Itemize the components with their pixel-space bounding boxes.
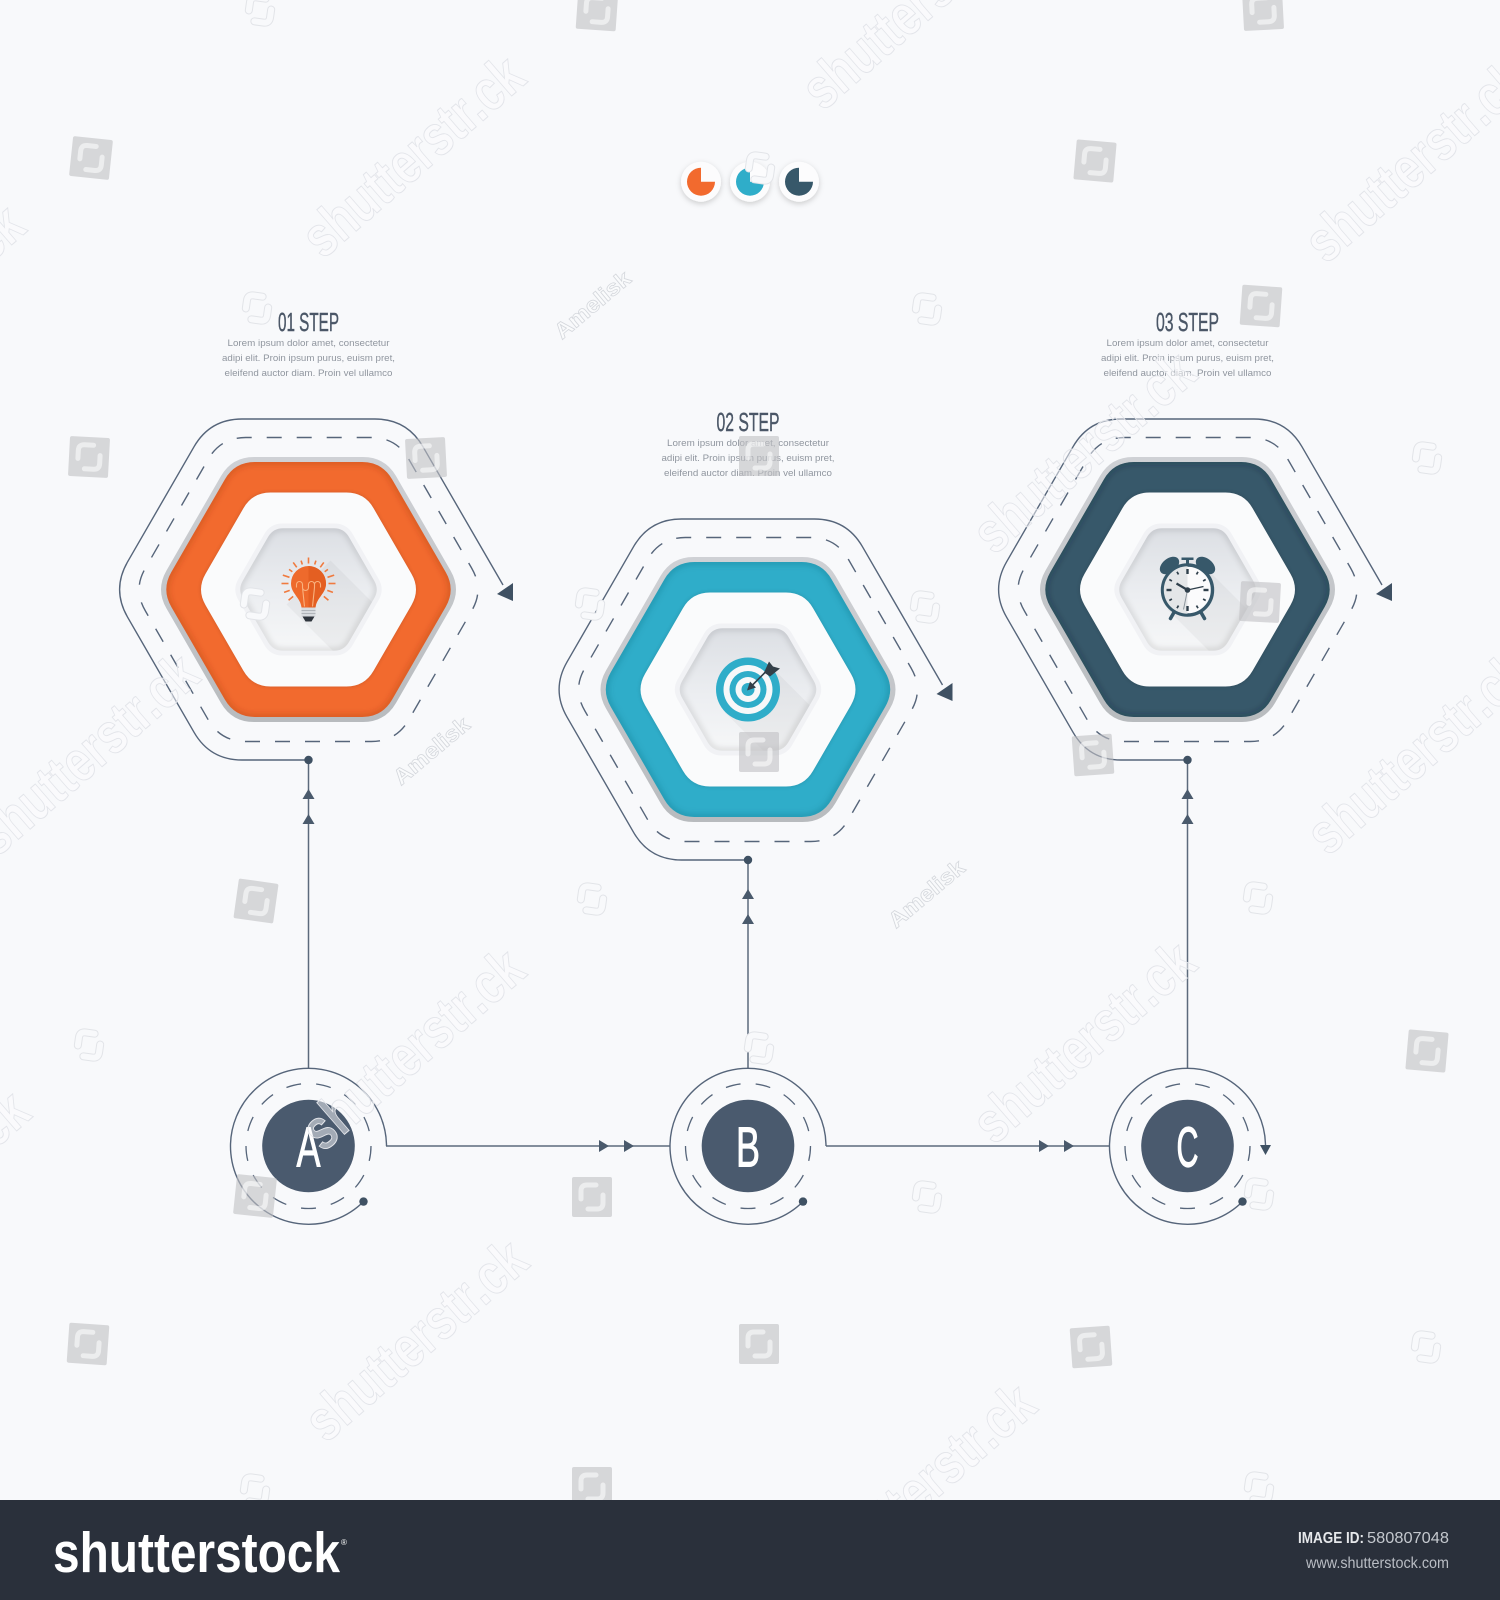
- icon: alarm clock: [1157, 553, 1218, 618]
- step 1 text block: [222, 307, 395, 379]
- step 2 body text: Lorem ipsum dolor amet, consectetur: [667, 438, 829, 449]
- watermark: contributor names: [388, 265, 970, 933]
- watermark: stock wordmarks: shutterstr.ck: [960, 338, 1208, 566]
- step 3 body text: Lorem ipsum dolor amet, consectetur: [1106, 338, 1268, 349]
- step 2 heading: 02 STEP: [716, 407, 780, 437]
- step 3 heading: 03 STEP: [1156, 307, 1219, 337]
- watermark: contributor names: Amelisk: [549, 265, 636, 344]
- step 3 body text: eleifend auctor diam. Proin vel ullamco: [1104, 368, 1272, 379]
- inner recess: [1114, 524, 1258, 656]
- dashed ring: [579, 538, 917, 842]
- step 1 body text: [222, 338, 395, 379]
- node C: [1110, 1068, 1271, 1224]
- arc end dot: [359, 1197, 368, 1206]
- pie badge: orange: [681, 162, 721, 202]
- footer logo: ®: [341, 1538, 347, 1547]
- dashed ring: [1018, 438, 1357, 742]
- image id: 580807048: [1367, 1530, 1449, 1547]
- teal hexagon: [1045, 462, 1330, 717]
- connector B to step 2: [742, 860, 754, 1068]
- image id: [1298, 1530, 1449, 1547]
- connector C to step 3: [1182, 760, 1194, 1068]
- footer logo: shutterstock: [53, 1521, 340, 1585]
- horizontal connector A to B: [386, 1140, 670, 1152]
- icon: target with arrow: [716, 658, 780, 722]
- node A: [231, 1068, 386, 1224]
- arc end dot: [1238, 1197, 1247, 1206]
- step 3 body text: [1101, 338, 1274, 379]
- step 2 body text: [662, 438, 834, 479]
- white hexagon: [201, 492, 416, 686]
- watermark: stock wordmarks: shutterstr.ck: [289, 42, 537, 270]
- footer bar: [0, 1500, 1500, 1600]
- step 1 body text: adipi elit. Proin ipsum purus, euism pret,: [222, 353, 395, 364]
- step 1 body text: eleifend auctor diam. Proin vel ullamco: [224, 368, 392, 379]
- dashed ring: [246, 1084, 371, 1208]
- horizontal connector B to C: [826, 1140, 1109, 1152]
- arc end dot: [799, 1197, 807, 1206]
- white hexagon: [1080, 492, 1295, 686]
- letter C: C: [1176, 1116, 1198, 1180]
- disc: [1141, 1100, 1234, 1192]
- letter B: B: [736, 1116, 760, 1180]
- watermark: contributor names: Amelisk: [883, 854, 970, 933]
- orange hexagon: [166, 462, 451, 717]
- pie badge: dark teal: [779, 162, 819, 202]
- step 1 heading: 01 STEP: [278, 307, 339, 337]
- inner recess: [675, 624, 821, 756]
- dashed ring: [686, 1084, 810, 1208]
- connector A to step 1: [302, 760, 314, 1068]
- disc: [262, 1100, 355, 1192]
- pie badge: blue: [730, 162, 770, 202]
- outer route with arrow and dot: [999, 419, 1392, 764]
- step 2 text block: [662, 407, 834, 479]
- outer arc: [231, 1068, 386, 1224]
- hexagon 2: blue, target: [559, 519, 952, 864]
- outer arc: [1110, 1068, 1266, 1224]
- white hexagon: [640, 592, 856, 786]
- watermark: stock wordmarks: shutterstr.ck: [800, 1370, 1048, 1598]
- image id: IMAGE ID:: [1298, 1530, 1364, 1547]
- watermark: stock wordmarks: shutterstr.ck: [292, 1226, 540, 1454]
- inner recess: [236, 524, 382, 656]
- hexagon bezel: [600, 557, 896, 822]
- node B: [670, 1068, 826, 1224]
- hexagon 1: orange, lightbulb: [120, 419, 513, 764]
- arc arrowhead: [1260, 1145, 1271, 1155]
- url: www.shutterstock.com: [1305, 1555, 1449, 1572]
- step 2 body text: adipi elit. Proin ipsum purus, euism pret,: [662, 453, 834, 464]
- watermark: stock wordmarks: shutterstr.ck: [289, 935, 537, 1163]
- step 3 text block: [1101, 307, 1274, 379]
- watermark: stock wordmarks: shutterstr.ck: [960, 928, 1208, 1156]
- icon: lightbulb: [282, 558, 336, 622]
- watermark: contributor names: Amelisk: [388, 711, 475, 790]
- outer route with arrow and dot: [559, 519, 952, 864]
- hexagon 3: dark teal, alarm clock: [999, 419, 1392, 764]
- outer arc: [670, 1068, 826, 1224]
- blue hexagon: [606, 562, 890, 817]
- outer route with arrow and dot: [120, 419, 513, 764]
- hexagon bezel: [161, 457, 456, 722]
- letter A: A: [296, 1116, 320, 1180]
- step 2 body text: eleifend auctor diam. Proin vel ullamco: [664, 468, 832, 479]
- step 3 body text: adipi elit. Proin ipsum purus, euism pret,: [1101, 353, 1274, 364]
- dashed ring: [1125, 1084, 1250, 1208]
- step 1 body text: Lorem ipsum dolor amet, consectetur: [228, 338, 390, 349]
- vertical connectors with arrowheads: [302, 760, 1194, 1068]
- disc: [702, 1100, 794, 1192]
- legend: three pie badges: [681, 162, 819, 202]
- dashed ring: [139, 438, 478, 742]
- hexagon bezel: [1040, 457, 1335, 722]
